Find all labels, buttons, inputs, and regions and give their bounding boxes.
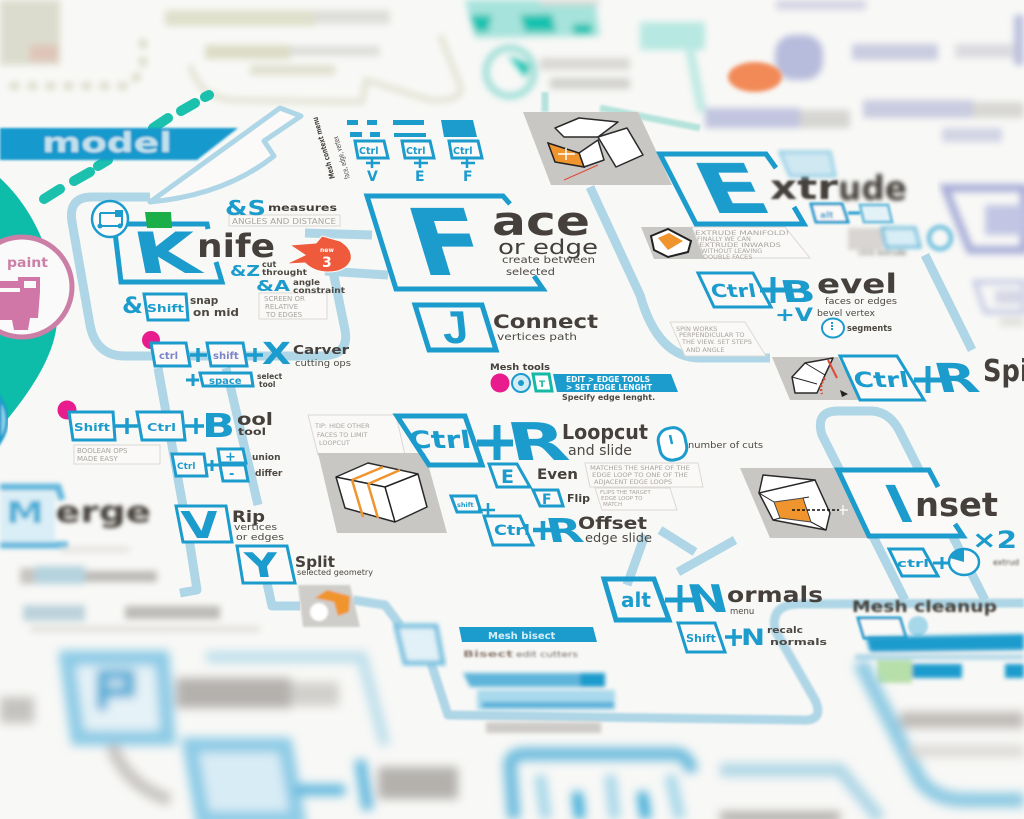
Shift key: Shift [74, 421, 110, 434]
plus [115, 418, 138, 434]
carver row: cutting ops [295, 359, 351, 369]
Shift key [69, 412, 115, 440]
&S measures: &S [225, 196, 266, 220]
tip note: FACES TO LIMIT [317, 431, 368, 439]
Face block [367, 191, 678, 402]
click extrude [848, 227, 951, 257]
shift key [678, 623, 725, 652]
union differ: differ [255, 469, 283, 479]
ormals: ormals [727, 583, 823, 607]
mesh cleanup [852, 597, 997, 638]
&A angle constraint: &A [256, 277, 291, 295]
spin Ctrl key [840, 356, 924, 400]
plus N small [725, 626, 765, 651]
mesh tools: Mesh tools [490, 363, 550, 373]
&S measures: ANGLES AND DISTANCE [232, 217, 336, 226]
spin note: PERPENDICULAR TO [679, 331, 745, 339]
teal mode arc [0, 178, 57, 422]
plus R [477, 413, 574, 473]
plus B [760, 275, 819, 310]
alt plus key [811, 204, 892, 222]
J key [415, 301, 496, 353]
left gray blob [0, 697, 34, 723]
green square [145, 212, 172, 228]
extrude thumbnail [523, 112, 672, 185]
blurred right panels [945, 188, 1024, 326]
merge sublines [20, 547, 260, 632]
xtrude start: xtr [770, 168, 838, 208]
mesh cleanup: Mesh cleanup [852, 597, 997, 616]
split thumbnail [298, 585, 360, 627]
lower key dark letters [295, 760, 368, 810]
pink badge [58, 400, 76, 420]
Rip label [232, 507, 285, 543]
union differ: + [225, 450, 236, 465]
P letter [102, 675, 130, 710]
thumbnail [740, 468, 868, 538]
tip note: TIP: HIDE OTHER [314, 422, 370, 430]
bisect caption: Bisect [463, 650, 514, 660]
vertex column [347, 120, 388, 185]
&Z cut through: cut [262, 260, 276, 269]
Even: Even [537, 467, 578, 483]
mouse icon [822, 318, 844, 338]
shift key [451, 496, 481, 512]
carver row [142, 331, 351, 372]
mesh tools [490, 363, 678, 402]
plus N: N [683, 578, 732, 622]
edge column: Ctrl [406, 146, 425, 157]
Connect: vertices path [497, 332, 577, 343]
Extrude block [641, 150, 951, 261]
plus R [533, 511, 587, 550]
shift key: Shift [686, 632, 716, 645]
extrude manifold note [692, 227, 810, 261]
select tool row [186, 372, 283, 389]
Bevel block [670, 269, 1024, 402]
light teal connector [545, 92, 700, 128]
create between selected: create between [502, 255, 595, 266]
Ctrl key [137, 412, 185, 440]
flip note: FLIPS THE TARGET [600, 490, 651, 496]
plus R: R [542, 511, 587, 550]
flip note [595, 488, 677, 510]
mesh tools: > SET EDGE LENGHT [566, 383, 653, 392]
Knife block [92, 196, 351, 389]
P key [67, 658, 168, 738]
P label fade [291, 682, 339, 706]
extrude manifold note: EXTRUDE MANIFOLD! [695, 229, 789, 237]
Rip label: vertices [234, 523, 278, 533]
&Shift snap on mid: on mid [193, 307, 239, 319]
union differ: union [252, 453, 280, 463]
plus [478, 503, 495, 517]
Loopcut block [308, 413, 764, 550]
rotated caption [311, 116, 352, 180]
extrude manifold note: FINALLY WE CAN [697, 235, 751, 243]
red hand badge: new [320, 247, 334, 254]
blurred banners [463, 673, 615, 733]
K letter: K [128, 220, 208, 287]
cleanup lower blurred [720, 662, 1024, 819]
union differ: - [229, 467, 234, 482]
spin note: SPIN WORKS [676, 325, 717, 333]
Flip: Flip [567, 493, 591, 505]
Ctrl key: Ctrl [407, 426, 473, 454]
M interior pipes [540, 775, 680, 819]
I letter: I [876, 475, 923, 534]
carver row: Carver [293, 342, 350, 357]
extrude manifold note: EXTRUDE INWARDS [699, 241, 781, 249]
screen or relative note: TO EDGES [265, 311, 303, 319]
lower label [378, 767, 458, 799]
knife outline icon [150, 108, 301, 202]
recalc normals [767, 626, 827, 648]
tip note [308, 415, 405, 455]
ctrl mouse row: extrud [993, 558, 1019, 567]
&Z cut through: &Z [230, 262, 260, 280]
V key [176, 503, 232, 547]
Offset: Offset [578, 514, 647, 534]
Ctrl key: Ctrl [147, 421, 176, 434]
cube thumbnail [318, 453, 447, 533]
&A angle constraint: constraint [293, 286, 345, 295]
select tool row: tool [259, 380, 275, 389]
plus N small: N [741, 626, 765, 651]
&S measures: measures [268, 203, 337, 214]
flip note: EDGE LOOP TO [601, 496, 643, 502]
extrude manifold note: DOUBLE FACES [703, 253, 752, 261]
spin note: AND ANGLE [686, 346, 724, 354]
union differ: Ctrl [177, 462, 195, 472]
alt plus key: alt [820, 211, 834, 221]
Ctrl key offset: Ctrl [494, 523, 530, 539]
tip note: LOOPCUT [319, 439, 350, 447]
pipes: connector lines [71, 187, 985, 606]
faces or edges: faces or edges [825, 297, 898, 307]
red hand badge [286, 236, 351, 272]
Normals block [604, 578, 827, 652]
plus R [914, 355, 984, 402]
boolean note: MADE EASY [77, 455, 119, 463]
K key [114, 224, 222, 282]
ctrl mouse row: ctrl [897, 557, 929, 570]
plus and B: B [202, 406, 235, 445]
&Shift snap on mid: snap [190, 295, 219, 307]
edge column [393, 120, 434, 185]
model banner: model [42, 126, 172, 159]
screen or relative note: RELATIVE [265, 303, 298, 311]
Split label: Split [295, 553, 335, 571]
select tool row: space [209, 376, 242, 387]
red hand badge: 3 [322, 255, 332, 271]
bisect caption [463, 650, 578, 660]
upper pipe [206, 657, 385, 745]
face column: F [463, 169, 473, 185]
paint mode circle: paint [7, 256, 48, 271]
E letter: E [682, 150, 783, 230]
spin note [670, 322, 766, 356]
boolean note [74, 445, 160, 464]
ool tool: tool [238, 427, 266, 438]
match note: MATCHES THE SHAPE OF THE [590, 466, 690, 472]
erge: erge [55, 495, 151, 529]
Ctrl key [698, 273, 771, 307]
Mesh context modes [311, 116, 482, 185]
Y key: Y [241, 546, 284, 586]
select tool row: select [257, 372, 283, 381]
ool tool: ool [237, 410, 273, 430]
times two: ×2 [972, 526, 1017, 554]
Split label [295, 553, 374, 577]
plus and B [185, 406, 235, 445]
screen or relative note: SCREEN OR [264, 295, 305, 303]
carver row: shift [213, 351, 239, 362]
model banner [0, 126, 238, 160]
match note [585, 463, 703, 487]
plus B: B [777, 275, 819, 310]
plus R: R [929, 355, 984, 402]
P label [176, 678, 291, 708]
f2 icon [396, 626, 443, 663]
&Z cut through: throught [262, 268, 307, 277]
alt key [604, 579, 669, 620]
lower key [190, 745, 298, 819]
menu: menu [730, 607, 754, 617]
blurred key above [780, 152, 835, 176]
&S measures [225, 196, 340, 226]
mesh tools: T [539, 380, 546, 390]
alt key: alt [621, 588, 651, 612]
I key [836, 469, 965, 537]
vertex column: Ctrl [359, 146, 378, 157]
match note: ADJACENT EDGE LOOPS [594, 480, 672, 486]
mouse icon [656, 425, 689, 462]
cleanup banners [855, 634, 1024, 683]
create between selected: selected [506, 267, 555, 278]
F key [533, 490, 563, 508]
extrude manifold note: WITHOUT LEAVING [701, 247, 762, 255]
rotated caption: face, edge, vertex [331, 135, 352, 180]
edge column: E [415, 169, 425, 185]
carver row: X [262, 337, 291, 372]
F letter: F [395, 191, 500, 297]
union differ [172, 449, 283, 482]
recalc normals: recalc [767, 626, 803, 636]
number of cuts: number of cuts [688, 441, 764, 451]
E key: E [501, 466, 514, 488]
V key: V [179, 503, 223, 547]
gray pipe under P [112, 745, 170, 800]
Inset block [740, 468, 1019, 576]
F key [367, 196, 543, 289]
paint mode circle [0, 237, 72, 337]
teal dashed line [44, 95, 209, 199]
&A angle constraint [256, 277, 345, 295]
plus R: R [502, 413, 574, 473]
boolean note: BOOLEAN OPS [77, 447, 128, 455]
Bool block [58, 400, 283, 482]
edge slide: edge slide [585, 530, 652, 545]
Rip label: or edges [236, 533, 285, 543]
ctrl mouse row [889, 549, 1019, 576]
Rip label: Rip [232, 507, 265, 526]
Ctrl key: Ctrl [709, 281, 758, 302]
merge key [0, 487, 68, 545]
shift key: shift [457, 501, 474, 509]
face column: Ctrl [453, 146, 472, 157]
J key: J [440, 301, 471, 353]
M key [510, 754, 692, 819]
ool tool [237, 410, 273, 438]
or edge: or edge [498, 235, 598, 259]
E key [489, 464, 530, 488]
bottom blurred keys [0, 657, 692, 819]
mesh tools: EDIT > EDGE TOOLS [566, 375, 650, 384]
screen or relative note [259, 293, 327, 319]
Merge blurred block [0, 487, 151, 545]
nset: nset [915, 485, 998, 524]
M glyph [0, 492, 55, 542]
&Shift snap on mid: Shift [147, 302, 184, 315]
face column [441, 120, 482, 185]
M letter [577, 792, 646, 819]
click extrude: click extrude [858, 248, 907, 257]
&Shift snap on mid: & [122, 294, 143, 319]
M glyph: M [6, 496, 44, 531]
flip note: MATCH [603, 502, 622, 508]
&A angle constraint: angle [293, 278, 321, 287]
plus N [665, 578, 732, 622]
create between selected [502, 255, 595, 278]
and slide: and slide [568, 443, 632, 459]
orange blob [728, 62, 782, 92]
nife: nife [197, 227, 275, 265]
recalc normals: normals [770, 638, 827, 648]
blurred top left olive group [0, 0, 461, 102]
Loopcut: Loopcut [562, 420, 648, 444]
Ctrl key offset [484, 516, 533, 545]
xtrude end: ude [838, 169, 907, 209]
spin thumbnail [772, 357, 860, 400]
&Z cut through [230, 260, 307, 280]
lower pipes blurred [353, 600, 1024, 720]
+V: +V [775, 304, 813, 326]
Rip and Split [176, 503, 374, 586]
Ctrl key [397, 416, 482, 465]
ace: ace [492, 199, 590, 245]
mesh bisect: Mesh bisect [488, 631, 556, 642]
blurred top right group [465, 0, 1024, 142]
match note: EDGE LOOP TO ONE OF THE [592, 473, 688, 479]
vertex column: V [367, 169, 378, 185]
spin Ctrl key: Ctrl [852, 367, 911, 392]
Split label: selected geometry [297, 568, 374, 577]
Connect [493, 311, 598, 343]
F key: F [542, 492, 552, 508]
spin note: THE VIEW. SET STEPS [681, 338, 752, 346]
blue circle bottom edge [0, 398, 7, 442]
E key [660, 154, 804, 224]
Connect: Connect [493, 311, 598, 333]
extrude manifold thumb [641, 227, 704, 259]
evel: evel [817, 269, 897, 300]
bisect caption: edit cutters [516, 650, 578, 659]
&Shift snap on mid [122, 294, 239, 320]
segments: segments [847, 324, 892, 334]
carver row: ctrl [159, 351, 178, 362]
Y key [237, 546, 295, 586]
mode icon [92, 201, 128, 237]
rotated caption: Mesh context menu [311, 116, 337, 180]
bevel vertex: bevel vertex [817, 309, 875, 319]
mesh bisect [459, 627, 597, 642]
mesh tools: Specify edge lenght. [562, 393, 655, 402]
